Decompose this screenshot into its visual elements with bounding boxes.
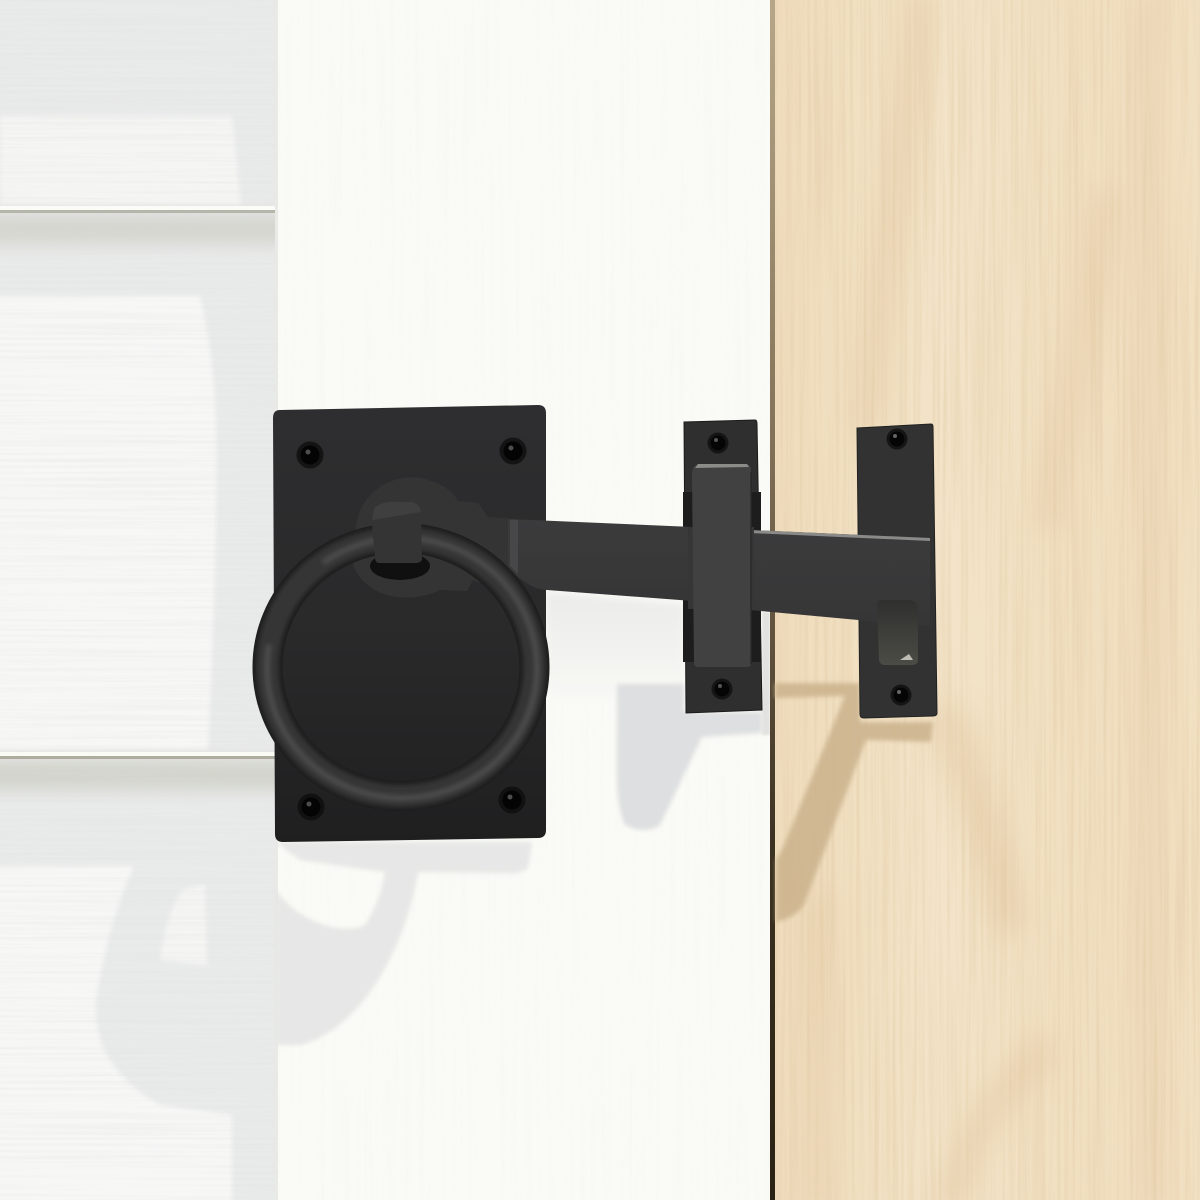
screw: strike top — [886, 428, 908, 450]
sunlit patch: lower board — [0, 866, 232, 1200]
board lip: lower — [0, 752, 275, 756]
screw: strike bottom — [890, 684, 912, 706]
board lip: upper — [0, 206, 275, 210]
sunlit patch: middle board — [0, 296, 216, 750]
sunlit patch: top board — [0, 116, 241, 205]
latch bar and pivot — [352, 477, 930, 626]
shadow: beside bar on trim — [762, 612, 770, 735]
bar: right section — [750, 530, 930, 626]
bar: left section — [508, 519, 693, 601]
bar fold highlight — [510, 520, 518, 574]
strike plate on gate — [857, 424, 937, 718]
pivot disc with cam — [352, 477, 515, 598]
keeper staple strap — [692, 464, 751, 667]
grain overlay: siding — [0, 0, 276, 1200]
lap shadow: lower board edge — [0, 760, 316, 790]
sunlit patch: inside ring shadow — [160, 885, 207, 965]
gap line between trim and gate — [770, 0, 775, 1200]
panel: white trim board — [275, 0, 771, 1200]
screw: plate top left — [296, 442, 324, 468]
screw: plate bottom right — [498, 786, 526, 814]
ring pull — [267, 538, 537, 798]
screw: plate bottom left — [298, 794, 324, 820]
shadows on trim — [276, 592, 770, 1045]
screw: plate top right — [500, 438, 526, 464]
panel: white clapboard siding — [0, 0, 316, 1200]
shadow: keeper plate — [617, 684, 762, 830]
shadow: plate and ring — [276, 842, 532, 1045]
stop catch — [877, 600, 918, 665]
shadow: under bar — [546, 592, 684, 700]
wood grain streaks — [771, 0, 1200, 1200]
ring bracket — [370, 502, 422, 563]
wood cathedral figure — [820, 0, 1150, 1200]
back plate — [273, 405, 546, 842]
bar top edge highlight — [750, 530, 930, 541]
shadow: latch on wood — [775, 683, 933, 922]
screw: keeper bottom — [712, 678, 732, 700]
panel: light wood gate — [770, 0, 1200, 1200]
bar crossing the keeper — [688, 527, 754, 609]
keeper plate — [683, 420, 762, 713]
ring mount hole — [370, 552, 430, 580]
lap shadow: upper board edge — [0, 214, 316, 244]
screw: keeper top — [708, 432, 728, 454]
